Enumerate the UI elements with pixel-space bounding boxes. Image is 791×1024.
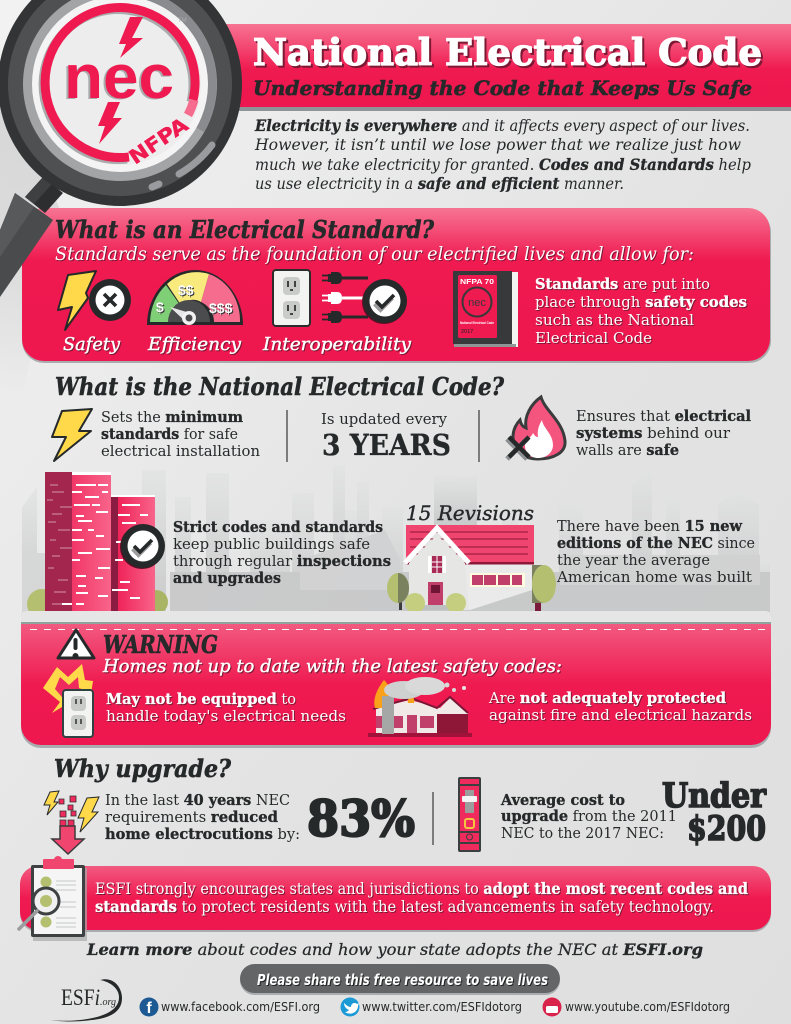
subheading: homes not up to date: Homes not up to date with the latest safety codes: [102,656,562,677]
text: ensures systems safe: systems behind our [576,425,730,442]
stat: 83 percent: 83% [307,789,415,848]
social: facebook: f [146,1000,152,1017]
logo: NEC ring: nec [64,43,174,112]
intro paragraph: Electricity is everywhere and it affects every aspect of our lives. [254,116,750,135]
red public buildings [27,472,168,619]
tree [387,573,409,610]
heading: electrical standard: What is an Electrical Standard? [55,215,435,244]
standards text [535,275,747,347]
stat: under 200 dollars: $200 [687,809,766,849]
text: average cost: upgrade from the 2011 [501,808,677,825]
label: efficiency: Efficiency [147,334,242,355]
social: facebook [140,998,320,1017]
text: minimum standards: Sets the minimum [101,409,244,426]
label: safety: Safety [63,334,121,355]
icon: NFPA 70 code book: 2017 [461,329,473,335]
label: interoperability: Interoperability [262,334,412,355]
text: strict codes [173,519,391,587]
social: twitter [340,998,522,1016]
text: updated every 3 years: 3 YEARS [322,428,451,462]
text: average cost: Average cost to [500,792,625,809]
label: 15 revisions: 15 Revisions [406,501,534,525]
logo: ESFi.org: .org [100,997,116,1008]
icon: sparking outlet [43,664,93,737]
text: strict codes: keep public buildings safe [173,537,370,553]
text: minimum standards: standards for safe [101,426,238,443]
text: ensures systems safe: Ensures that electrical [576,408,751,425]
house illustration [387,525,556,613]
text: updated every 3 years: Is updated every [321,412,448,428]
panel: esfi callout [19,856,771,941]
icon: NFPA 70 code book: NFPA 70 [460,277,494,286]
icon: flame with x [507,397,565,459]
text: learn more: Learn more about codes and how your state adopts the NEC at ESFI.org [86,940,703,959]
heading: warning: WARNING [103,630,218,659]
logo: NEC ring [43,8,195,169]
icon: efficiency gauge [147,270,243,325]
text: ensures systems safe: walls are safe [576,442,679,459]
icon: NFPA 70 code book: National Electrical Code [460,321,494,325]
text: not adequately protected: Are not adequately protected [488,690,726,707]
title: National Electrical Code [253,32,762,74]
text: 15 new editions: editions of the NEC since [557,535,755,552]
handle [0,177,63,297]
tree [532,565,556,611]
icon: efficiency gauge: $ [156,299,164,315]
text: strict codes: and upgrades [173,570,281,587]
standards text: such as the National [535,311,694,329]
logo: ESFi.org: ESFi [61,985,100,1010]
skyline [22,465,770,612]
callout text: standards to protect residents with the latest advancements in safety technology. [95,897,714,916]
subtitle: Understanding the Code that Keeps Us Safe [253,76,752,100]
icon: NFPA 70 code book [453,271,518,347]
text: ensures systems safe [576,408,751,459]
heading: why upgrade: Why upgrade? [54,754,232,783]
magnifying glass [0,0,242,297]
magnifier shadow [0,60,60,400]
text: 15 new editions: There have been 15 new [557,518,743,535]
pill: share: Please share this free resource to save lives [257,971,548,989]
pill: share [240,964,560,995]
text: minimum standards: electrical installation [101,444,260,460]
text: average cost [500,792,677,842]
logo: NEC ring: NFPA [124,112,193,169]
logo: ESFi.org [51,979,122,1022]
social: youtube: www.youtube.com/ESFIdotorg [565,1000,730,1014]
social: twitter: www.twitter.com/ESFIdotorg [362,1000,522,1014]
icon: safety bolt and x [58,271,131,330]
icon: efficiency gauge: $$$ [209,300,233,316]
social: facebook: www.facebook.com/ESFI.org [161,1000,320,1014]
icon: electrocution reduction arrow [44,791,99,854]
callout text: ESFI strongly encourages states and jurisdictions to adopt the most recent codes and [95,879,748,898]
panel: what is an electrical standard [22,208,771,363]
stat: under 200 dollars: Under [662,776,767,816]
text: may not be equipped [106,691,346,725]
subheading: standards: Standards serve as the foundation of our electrified lives and allow for: [55,243,694,265]
icon: warning triangle [58,630,94,659]
text: not adequately protected [488,690,752,724]
text: may not be equipped: May not be equipped to [106,691,296,708]
icon: circuit breaker [459,778,480,851]
logo: NEC ring: TM [178,18,187,24]
intro paragraph: us use electricity in a safe and efficient manner. [255,174,624,193]
text: 15 new editions: the year the average [557,553,710,569]
stat: under 200 dollars [662,776,767,849]
intro paragraph [254,116,751,193]
icon: clipboard with magnifier [19,856,87,941]
text: reduced electrocutions: In the last 40 years NEC [105,792,290,809]
standards text: Electrical Code [535,329,652,347]
text: reduced electrocutions: requirements reduced [105,809,278,826]
text: updated every 3 years [321,412,451,462]
heading: national electrical code: What is the National Electrical Code? [55,372,505,401]
icon: yellow bolt [52,409,92,461]
standards text: Standards are put into [535,275,710,293]
text: may not be equipped: handle today's electrical needs [106,709,346,725]
text: 15 new editions: American home was built [556,570,752,586]
social: youtube [542,998,730,1016]
text: strict codes: through regular inspections [173,553,391,570]
icon: efficiency gauge: $$ [178,282,194,298]
intro paragraph: much we take electricity for granted. Codes and Standards help [255,155,751,174]
icon: house on fire [368,677,472,737]
text: reduced electrocutions: home electrocutions by: [105,826,300,843]
header banner [225,24,791,111]
text: strict codes: Strict codes and standards [173,519,383,536]
intro paragraph: However, it isn’t until we lose power that we realize just how [254,136,741,154]
standards text: place through safety codes [535,293,747,311]
panel: warning [21,611,771,748]
text: average cost: NEC to the 2017 NEC: [501,826,664,842]
text: 15 new editions [556,518,755,586]
text: minimum standards [101,409,260,460]
icon: NFPA 70 code book: nec [468,297,486,309]
text: reduced electrocutions [105,792,300,843]
text: not adequately protected: against fire and electrical hazards [489,708,752,724]
callout text [95,879,748,916]
icon: outlet with plugs [273,270,407,326]
